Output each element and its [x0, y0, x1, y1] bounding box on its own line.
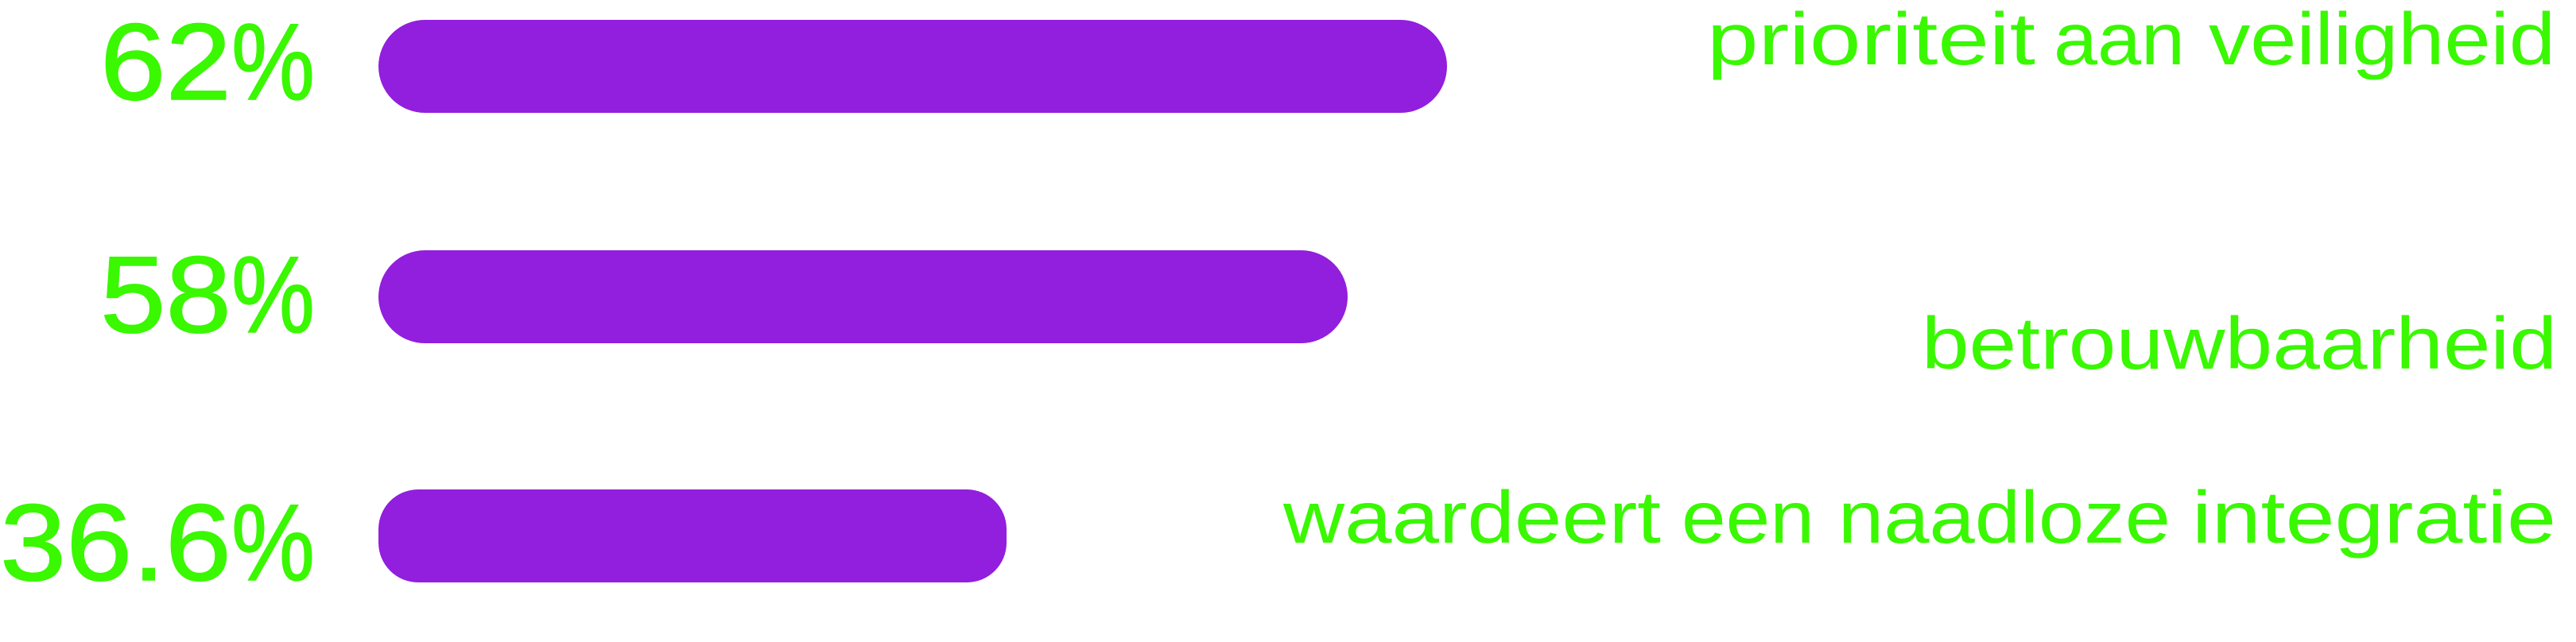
bar: 58% [378, 250, 1348, 343]
label: betrouwbaarheid: betrouwbaarheid [1922, 302, 2557, 385]
label: waardeert een naadloze integratie: een [1682, 476, 1814, 559]
row: 62% prioriteit aan veiligheid [100, 0, 2555, 123]
label: waardeert een naadloze integratie [1282, 476, 2556, 559]
label: waardeert een naadloze integratie: integratie [2192, 476, 2556, 559]
label: prioriteit aan veiligheid: aan [2054, 0, 2185, 80]
bar: 36.6% [378, 489, 1007, 582]
label: waardeert een naadloze integratie: waardeert [1282, 476, 1661, 559]
value: 58% [100, 234, 315, 356]
value: 58%: 58 [100, 234, 231, 356]
bar: 62% [378, 20, 1447, 113]
value: 62%: % [231, 2, 315, 123]
value: 36.6% [0, 482, 315, 604]
label: prioriteit aan veiligheid: prioriteit [1707, 0, 2035, 80]
label: prioriteit aan veiligheid [1707, 0, 2555, 80]
value: 62%: 62 [100, 2, 231, 123]
row: 36.6% waardeert een naadloze integratie [0, 476, 2556, 604]
row: 58% betrouwbaarheid [100, 234, 2557, 385]
value: 62% [100, 2, 315, 123]
label: waardeert een naadloze integratie: naadloze [1838, 476, 2171, 559]
value: 58%: % [231, 234, 315, 356]
value: 36.6%: 36.6 [0, 482, 231, 604]
value: 36.6%: % [231, 482, 315, 604]
label: prioriteit aan veiligheid: veiligheid [2209, 0, 2555, 80]
